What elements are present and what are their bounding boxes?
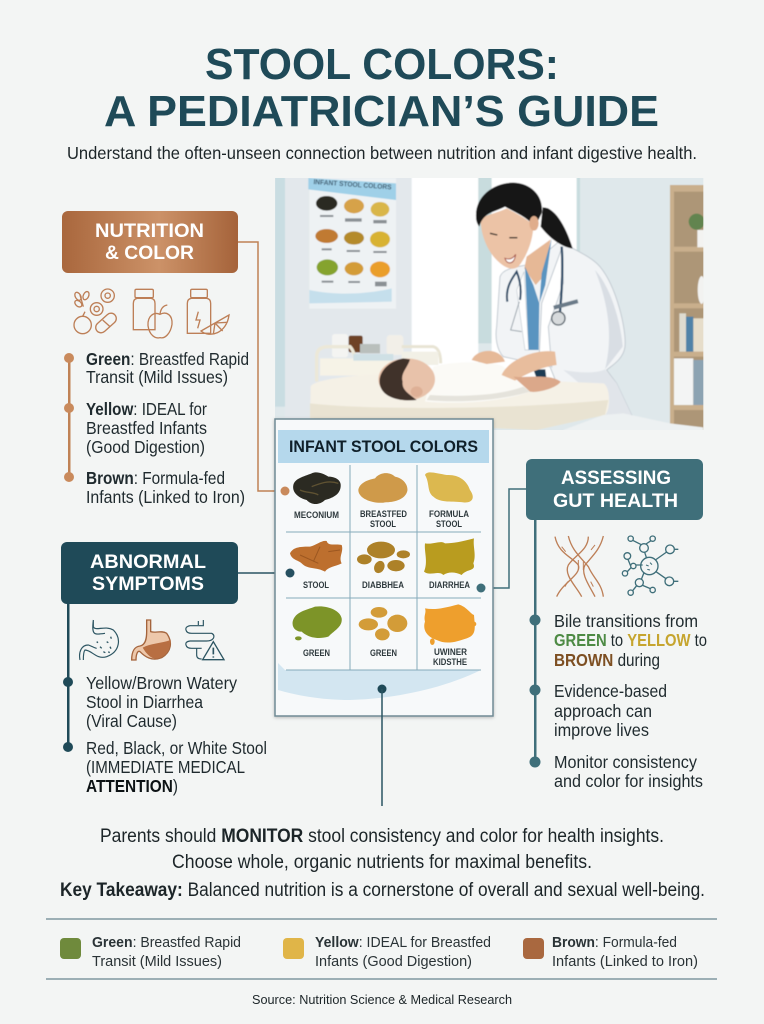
takeaway text: Choose whole, organic nutrients for maximal benefits.	[172, 852, 592, 873]
panel: nutrition and color	[62, 211, 249, 507]
subtitle: Understand the often-unseen connection between nutrition and infant digestive health.	[67, 143, 697, 163]
card footer wave	[278, 663, 481, 700]
stool labels: STOOL	[436, 519, 462, 529]
bullet: yellow: Yellow: IDEAL for	[86, 399, 207, 419]
swatch: stool	[290, 541, 342, 572]
legend item: green	[60, 934, 241, 970]
legend item: yellow: Yellow: IDEAL for Breastfed	[315, 934, 491, 951]
timeline	[530, 520, 540, 768]
legend item: green: Transit (Mild Issues)	[92, 953, 222, 970]
bullet: monitor	[554, 752, 703, 791]
card header	[278, 430, 489, 463]
icon: molecule network	[622, 536, 678, 595]
takeaway text	[60, 826, 705, 901]
source: Source: Nutrition Science & Medical Research	[252, 992, 512, 1007]
heading: nutrition and color: NUTRITION	[95, 221, 204, 242]
photo: pediatrician examining infant: INFANT STOOL COLORS	[313, 179, 392, 191]
stool labels: DIARRHEA	[429, 580, 470, 590]
legend item: yellow	[283, 934, 491, 970]
stool labels: DIABBHEA	[362, 580, 404, 590]
bullet: red black white stool: (IMMEDIATE MEDICAL	[86, 757, 245, 777]
baby	[425, 362, 530, 403]
stool labels: STOOL	[303, 580, 329, 590]
connector dots on card	[280, 486, 486, 694]
title: A PEDIATRICIAN’S GUIDE	[104, 87, 659, 136]
bullet: watery stool: Stool in Diarrhea	[86, 692, 203, 712]
bullet: brown: Brown: Formula-fed	[86, 468, 225, 488]
card grid	[286, 465, 481, 670]
icon: supplement jar and citrus	[187, 289, 229, 334]
stool labels: STOOL	[370, 519, 396, 529]
bullet: green: Green: Breastfed Rapid	[86, 349, 249, 369]
poster	[309, 178, 396, 309]
swatch: green	[293, 606, 342, 640]
connector: nutrition to card	[238, 242, 285, 491]
heading: assessing gut health: ASSESSING	[561, 468, 671, 489]
photo: pediatrician examining infant	[270, 170, 710, 437]
icon: stomach filled	[132, 620, 171, 660]
card header: INFANT STOOL COLORS	[289, 437, 478, 456]
legend item: green: Green: Breastfed Rapid	[92, 934, 241, 951]
cart	[332, 334, 348, 357]
legend	[60, 934, 698, 970]
bullet: bile transitions: Bile transitions from	[554, 611, 698, 631]
bullet: bile transitions: BROWN during	[554, 650, 660, 670]
bullet: brown: Infants (Linked to Iron)	[86, 487, 245, 507]
swatch: breastfed stool	[358, 473, 407, 503]
heading: assessing gut health	[526, 459, 703, 520]
connector: abnormal to card	[238, 572, 290, 574]
bullet: evidence-based	[554, 681, 667, 740]
bullet: red black white stool: Red, Black, or White Stool	[86, 738, 267, 758]
stool labels: KIDSTHE	[433, 657, 467, 667]
bullet: brown	[86, 468, 245, 507]
connector: card to takeaway	[381, 689, 383, 806]
bullet: yellow	[86, 399, 207, 457]
swatch: diarrhea	[424, 538, 475, 575]
legend item: yellow: Infants (Good Digestion)	[315, 953, 472, 970]
coat	[496, 241, 632, 415]
bullet: evidence-based: improve lives	[554, 720, 649, 740]
bullet: watery stool: (Viral Cause)	[86, 711, 177, 731]
panel: abnormal symptoms	[61, 542, 267, 796]
swatch: meconium	[293, 472, 341, 504]
bullet: red black white stool: ATTENTION)	[86, 776, 178, 796]
swatch: green pieces	[359, 607, 407, 640]
stool labels: MECONIUM	[294, 510, 339, 520]
heading: nutrition and color	[62, 211, 238, 273]
bullet: evidence-based: approach can	[554, 701, 652, 721]
bullet: monitor: and color for insights	[554, 771, 703, 791]
stool labels: UWINER	[434, 647, 467, 657]
panel: infant stool colors card	[275, 419, 493, 716]
stool labels: FORMULA	[429, 509, 469, 519]
shelf	[670, 185, 707, 430]
heading: abnormal symptoms	[61, 542, 238, 604]
timeline	[63, 604, 73, 752]
swatch: diabbhea	[357, 542, 410, 575]
legend item: brown	[523, 934, 698, 970]
stool labels	[294, 509, 470, 667]
bullet: bile transitions: GREEN to YELLOW to	[554, 630, 707, 650]
bullet: red black white stool	[86, 738, 267, 796]
timeline	[64, 353, 74, 482]
bullet: evidence-based: Evidence-based	[554, 681, 667, 701]
head and hair	[541, 207, 573, 249]
takeaway text: Parents should MONITOR stool consistency and color for health insights.	[100, 826, 664, 847]
bullet: green	[86, 349, 249, 387]
connector: assessing to card	[481, 489, 526, 588]
heading: abnormal symptoms: ABNORMAL	[90, 552, 206, 573]
bullet: bile transitions	[554, 611, 707, 670]
heading: assessing gut health: GUT HEALTH	[553, 491, 678, 512]
legend item: brown: Brown: Formula-fed	[552, 934, 677, 951]
title: STOOL COLORS:	[205, 40, 559, 89]
icon: crossed intestinal strands	[555, 536, 603, 597]
heading: abnormal symptoms: SYMPTOMS	[92, 574, 204, 595]
icon: whole foods and capsule	[74, 289, 118, 335]
icon: stomach with particles	[80, 620, 118, 660]
swatch: uwiner kidsthe	[424, 604, 476, 645]
hands	[472, 351, 505, 364]
bullet: yellow: Breastfed Infants	[86, 418, 207, 438]
legend item: brown: Infants (Linked to Iron)	[552, 953, 698, 970]
heading: nutrition and color: & COLOR	[105, 243, 194, 264]
stethoscope	[560, 247, 562, 312]
stool labels: BREASTFED	[360, 509, 407, 519]
title	[104, 40, 659, 136]
panel: assessing gut health	[526, 459, 707, 791]
icon: supplement jar and apple	[133, 289, 172, 338]
bullet: watery stool	[86, 673, 237, 731]
icon: intestine warning	[186, 620, 224, 660]
stool labels: GREEN	[370, 648, 397, 658]
pad	[310, 376, 609, 414]
bullet: yellow: (Good Digestion)	[86, 437, 205, 457]
swatch: formula stool	[425, 472, 473, 502]
bullet: watery stool: Yellow/Brown Watery	[86, 673, 237, 693]
stool labels: GREEN	[303, 648, 330, 658]
bullet: monitor: Monitor consistency	[554, 752, 697, 772]
bullet: green: Transit (Mild Issues)	[86, 367, 228, 387]
takeaway text: Key Takeaway: Balanced nutrition is a cornerstone of overall and sexual well-being.	[60, 880, 705, 901]
stool swatches	[290, 472, 476, 645]
